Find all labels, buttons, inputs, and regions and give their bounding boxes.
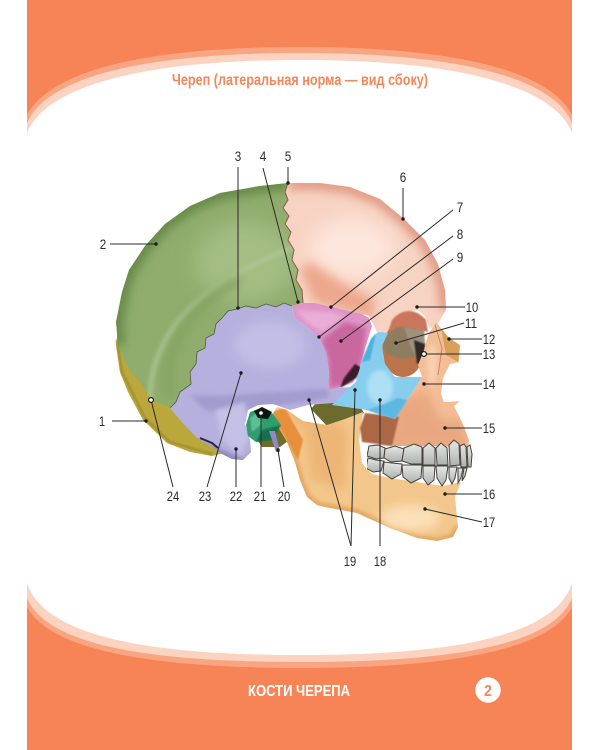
callout numbers: 4 xyxy=(260,149,267,164)
page number badge: 2 xyxy=(484,683,492,700)
sphenoid bone xyxy=(292,303,372,390)
callout numbers: 6 xyxy=(400,170,406,185)
callout numbers: 2 xyxy=(100,237,106,252)
callout numbers: 12 xyxy=(483,332,495,347)
zygomatic bone xyxy=(332,332,422,419)
callout numbers: 15 xyxy=(483,421,495,436)
footer section title: КОСТИ ЧЕРЕПА xyxy=(248,683,350,700)
top arc layers xyxy=(27,47,572,600)
frontal bone xyxy=(284,183,446,333)
occipital bone xyxy=(116,328,235,456)
callout numbers: 1 xyxy=(99,414,105,429)
callout numbers: 9 xyxy=(457,250,463,265)
frontal suture xyxy=(283,183,303,303)
orbit xyxy=(382,311,428,377)
parietal bone xyxy=(116,183,302,407)
callout dots xyxy=(144,181,451,511)
title: Череп (латеральная норма — вид сбоку) xyxy=(172,72,428,89)
callout numbers: 5 xyxy=(285,149,291,164)
callout numbers: 22 xyxy=(230,489,242,504)
callout numbers: 3 xyxy=(235,149,241,164)
callout numbers: 18 xyxy=(374,554,386,569)
upper teeth xyxy=(367,445,385,459)
styloid process xyxy=(269,431,280,452)
bottom arc layers xyxy=(27,570,572,668)
callout numbers: 8 xyxy=(457,227,463,242)
callout numbers: 23 xyxy=(199,489,211,504)
page number badge xyxy=(475,677,501,703)
callout numbers: 7 xyxy=(457,200,463,215)
callout numbers: 19 xyxy=(344,554,356,569)
skull illustration xyxy=(110,178,475,545)
temporal suture outline xyxy=(170,303,292,408)
temporal bone xyxy=(170,304,350,460)
callout numbers: 10 xyxy=(466,300,478,315)
callout numbers xyxy=(99,149,496,569)
tympanic part xyxy=(246,407,281,442)
callout leader lines xyxy=(110,167,482,546)
callout numbers: 17 xyxy=(483,515,495,530)
skull base behind jaw xyxy=(255,398,364,447)
maxilla and nasal xyxy=(380,322,469,448)
callout numbers: 13 xyxy=(483,347,495,362)
nasal aperture xyxy=(442,363,461,402)
page gap behind teeth xyxy=(360,442,367,470)
mandible xyxy=(272,407,461,541)
teeth xyxy=(366,440,472,486)
lower teeth xyxy=(366,458,384,472)
callout numbers: 11 xyxy=(465,316,477,331)
callout numbers: 24 xyxy=(167,489,180,504)
maxilla dark back xyxy=(360,413,399,446)
callout numbers: 14 xyxy=(483,377,496,392)
callout numbers: 20 xyxy=(278,489,290,504)
callout numbers: 16 xyxy=(483,487,495,502)
callout numbers: 21 xyxy=(254,489,266,504)
